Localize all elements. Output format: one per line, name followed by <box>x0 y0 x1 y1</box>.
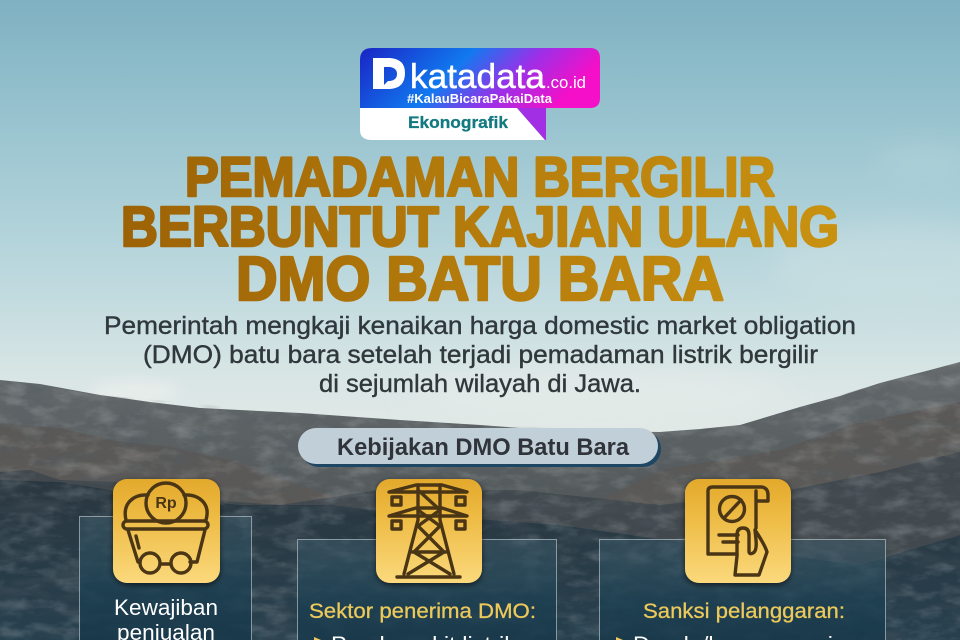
logo label: Ekonografik: Ekonografik <box>408 113 509 132</box>
icon: coal cart with rupiah: Rp <box>155 495 177 512</box>
panel: sektor penerima DMO <box>298 540 556 640</box>
intro text: di sejumlah wilayah di Jawa. <box>319 370 641 398</box>
panel: kewajiban penjualan <box>80 516 252 640</box>
title: BERBUNTUT KAJIAN ULANG <box>121 195 839 259</box>
mine pit rock background <box>0 362 960 640</box>
panel heading: sanksi: Sanksi pelanggaran: <box>643 599 845 623</box>
logo: katadata <box>360 48 600 140</box>
intro text: (DMO) batu bara setelah terjadi pemadaman listrik bergilir <box>143 341 818 369</box>
bullet marker <box>314 637 321 640</box>
logo wordmark: katadata <box>410 58 545 96</box>
bullet marker <box>616 637 623 640</box>
icon: coal cart with rupiah <box>113 479 220 583</box>
panel heading: sektor penerima: Sektor penerima DMO: <box>309 599 536 623</box>
intro text <box>104 312 856 398</box>
title: PEMADAMAN BERGILIR <box>185 145 775 208</box>
logo mark: D speech bubble <box>373 58 405 89</box>
sky background <box>0 0 960 440</box>
section heading pill: Kebijakan DMO Batu Bara <box>337 434 630 461</box>
intro text: Pemerintah mengkaji kenaikan harga domestic market obligation <box>104 312 856 340</box>
logo domain: .co.id <box>546 73 586 92</box>
title <box>121 145 839 314</box>
section heading pill <box>298 428 661 467</box>
panel: sanksi pelanggaran <box>600 540 886 640</box>
panel text: kewajiban: Kewajiban <box>114 595 218 620</box>
logo hashtag: #KalauBicaraPakaiData <box>407 91 553 106</box>
icon: electricity pylon <box>376 479 482 583</box>
title: DMO BATU BARA <box>236 245 724 314</box>
icon: sanction document in hand <box>685 479 791 583</box>
